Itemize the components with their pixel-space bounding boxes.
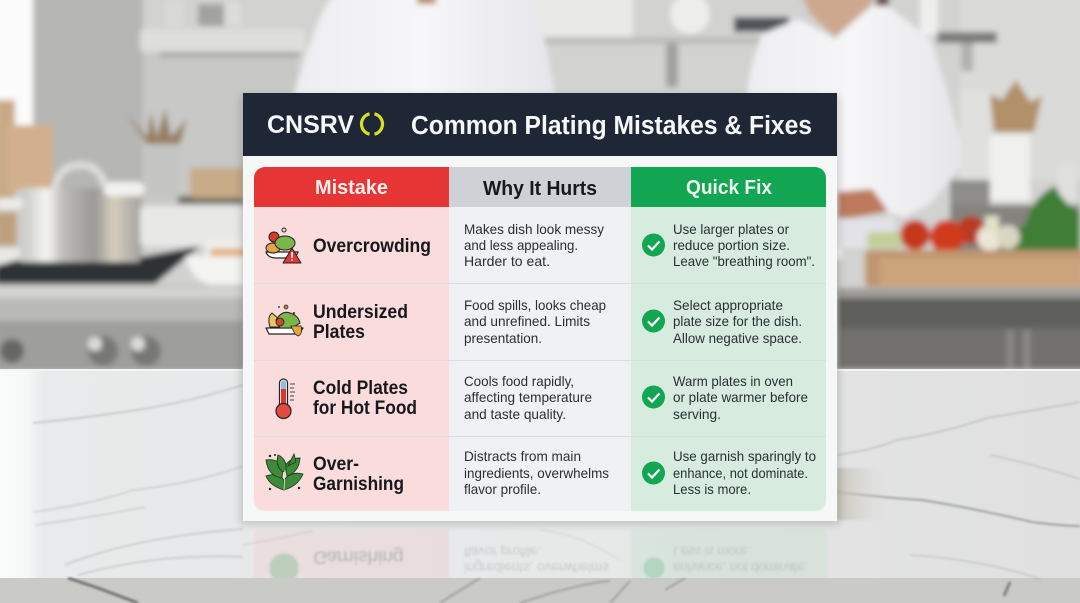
column heading: why it hurts: Why It Hurts (483, 177, 597, 200)
row: cold plates (276, 374, 808, 422)
fix text: serving. (673, 407, 721, 422)
fix text: Use garnish sparingly to (673, 449, 816, 464)
why text: Makes dish look messy (464, 222, 604, 237)
why text: and taste quality. (464, 407, 566, 422)
fix text (673, 449, 816, 497)
why text: Distracts from main (464, 449, 581, 464)
why text: Harder to eat. (464, 254, 550, 269)
icon: check (642, 386, 665, 408)
fix text (673, 298, 802, 346)
blurred kitchen background (0, 0, 1080, 380)
cutting boards left (0, 100, 15, 200)
why text: and less appealing. (464, 238, 578, 253)
why text: Food spills, looks cheap (464, 298, 606, 313)
why text: presentation. (464, 331, 542, 346)
fix text: Select appropriate (673, 298, 783, 313)
card reflection (255, 530, 825, 578)
icon: check (642, 234, 665, 256)
why text: and unrefined. Limits (464, 314, 590, 329)
icon: check (642, 462, 665, 484)
centre wall items (527, 0, 633, 37)
right counter back (950, 205, 1080, 260)
chef 2 (746, 5, 961, 259)
mistake label (313, 378, 417, 419)
white surface behind pot (0, 248, 25, 270)
tomatoes (900, 220, 930, 250)
why text: Cools food rapidly, (464, 374, 574, 389)
icon: herb sprig (266, 454, 303, 490)
card reflection: ingredients, overwhelms (464, 560, 609, 575)
card reflection: Less is more. (673, 544, 751, 559)
row: overcrowding (266, 222, 815, 269)
greens (1000, 186, 1080, 252)
fix text: reduce portion size. (673, 238, 790, 253)
card reflection: flavor profile. (464, 544, 541, 559)
icon: thermometer (276, 379, 295, 418)
fix text (673, 222, 815, 269)
fix text: or plate warmer before (673, 390, 808, 405)
why text: flavor profile. (464, 482, 541, 497)
row: undersized plates (266, 298, 802, 346)
column heading: mistake: Mistake (315, 176, 388, 199)
mistake label: Overcrowding (313, 236, 431, 257)
table (254, 167, 826, 511)
card reflection: enhance, not dominate. (673, 560, 808, 575)
fix text (673, 374, 808, 422)
mistake label: for Hot Food (313, 398, 417, 419)
why text (464, 449, 609, 497)
icon: check (642, 310, 665, 332)
card shadow (240, 95, 840, 525)
fix text: Allow negative space. (673, 331, 802, 346)
row: over-garnishing (266, 449, 816, 497)
garlic (977, 225, 1003, 251)
panel: card (243, 93, 837, 521)
why text: affecting temperature (464, 390, 592, 405)
bowl (205, 240, 245, 258)
marble countertop (0, 369, 1080, 603)
title: Common Plating Mistakes & Fixes (411, 112, 812, 140)
mistake label (313, 454, 404, 495)
fix text: Use larger plates or (673, 222, 789, 237)
left counter (0, 285, 245, 321)
right counter (837, 288, 1080, 300)
mistake label: Over- (313, 454, 359, 475)
icon: crowded plate with warning (266, 228, 301, 263)
why text: ingredients, overwhelms (464, 466, 609, 481)
brand name: CNSRV (267, 111, 354, 139)
card reflection: Garnishing (313, 546, 404, 567)
fix text: Less is more. (673, 482, 751, 497)
column heading: quick fix: Quick Fix (686, 176, 773, 199)
fix text: plate size for the dish. (673, 314, 802, 329)
icon: brand ring (361, 114, 383, 134)
chef 1 (292, 0, 556, 100)
why text (464, 222, 604, 269)
mistake label: Plates (313, 322, 365, 343)
yellow veg (867, 232, 901, 248)
chopping board (865, 250, 1080, 287)
right crock (990, 135, 1030, 201)
why text (464, 298, 606, 346)
mistake label: Garnishing (313, 474, 404, 495)
header bar (243, 93, 837, 156)
mistake label (313, 302, 408, 343)
pot (20, 188, 140, 262)
fix text: Warm plates in oven (673, 374, 793, 389)
icon: small plate with spilling food (266, 305, 303, 336)
stove (0, 246, 200, 284)
why text (464, 374, 592, 422)
fix text: enhance, not dominate. (673, 466, 808, 481)
mistake label: Cold Plates (313, 378, 408, 399)
mistake label: Undersized (313, 302, 408, 323)
fix text: Leave "breathing room". (673, 254, 815, 269)
utensil crock and bowl (125, 109, 187, 147)
left shelf (140, 29, 305, 52)
